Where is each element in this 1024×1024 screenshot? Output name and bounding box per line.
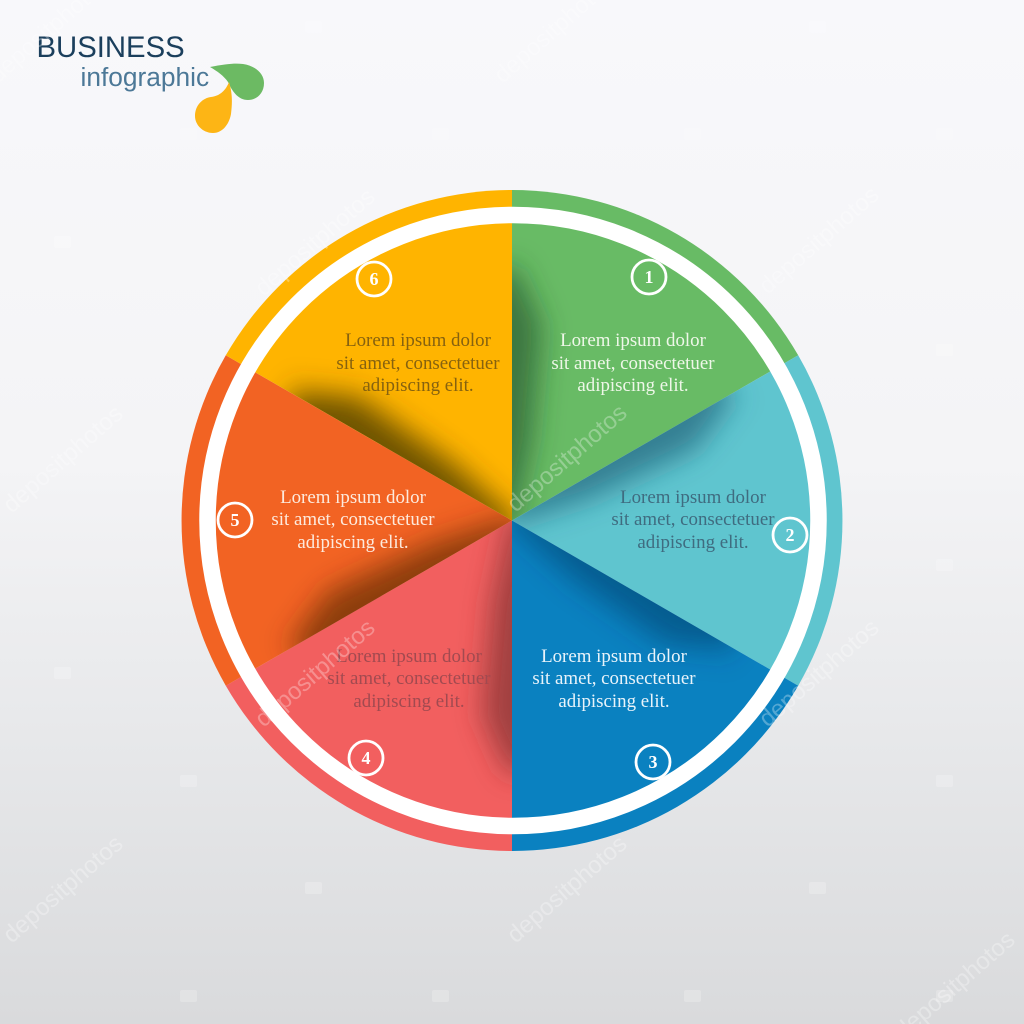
stock photo watermarks: depositphotos	[754, 614, 884, 733]
logo subheading: infographic	[80, 62, 209, 92]
panel 2 number badge: 2	[786, 525, 794, 545]
panel 3 number badge: 3	[648, 752, 658, 772]
panel 1 text: sit amet, consectetuer	[551, 353, 715, 374]
panel 6 text: sit amet, consectetuer	[336, 353, 500, 374]
panel 6 number badge	[357, 262, 391, 296]
panel 6 text: adipiscing elit.	[362, 375, 474, 396]
panel 5 text: adipiscing elit.	[297, 532, 409, 553]
panel 5 number badge: 5	[230, 510, 240, 530]
panel 2 number badge	[773, 518, 807, 552]
segment 4: red	[226, 520, 512, 851]
stock photo watermarks: depositphotos	[502, 830, 632, 949]
icon: green petal	[210, 64, 264, 100]
panel 1 number badge	[632, 260, 666, 294]
segment 1: green	[512, 190, 798, 520]
segment 3: blue	[512, 520, 798, 851]
panel 5 text: Lorem ipsum dolor	[280, 487, 427, 508]
segment 6: yellow	[226, 190, 512, 520]
stock photo watermarks: depositphotos	[250, 614, 380, 733]
white ring	[208, 215, 818, 826]
panel 3 number badge	[636, 745, 670, 779]
stock photo watermarks: depositphotos	[0, 830, 128, 949]
panel 1 text: Lorem ipsum dolor	[560, 330, 707, 351]
icon: orange petal	[195, 82, 232, 133]
stock photo watermarks: depositphotos	[502, 399, 632, 518]
panel 3 text: Lorem ipsum dolor	[541, 646, 688, 667]
segment 5: orange	[182, 355, 546, 686]
stock photo watermarks: depositphotos	[0, 400, 128, 519]
panel 2 text: Lorem ipsum dolor	[620, 487, 767, 508]
panel 1 number badge: 1	[644, 267, 654, 287]
panel 4 text: Lorem ipsum dolor	[336, 646, 483, 667]
stock photo watermarks: depositphotos	[754, 181, 884, 300]
panel 2 text: adipiscing elit.	[637, 532, 749, 553]
panel 1 text: adipiscing elit.	[577, 375, 689, 396]
segment 2: teal	[478, 355, 842, 686]
panel 5 number badge	[218, 503, 252, 537]
stock photo watermarks: depositphotos	[250, 183, 380, 302]
panel 6 text: Lorem ipsum dolor	[345, 330, 492, 351]
panel 4 number badge	[349, 741, 383, 775]
pie chart	[182, 190, 842, 851]
panel 4 text: sit amet, consectetuer	[327, 668, 491, 689]
logo	[36, 31, 264, 133]
panel 4 number badge: 4	[362, 748, 370, 768]
panel 6 number badge: 6	[370, 269, 378, 289]
panel 2 text: sit amet, consectetuer	[611, 509, 775, 530]
panel 3 text: adipiscing elit.	[558, 691, 670, 712]
panel 5 text: sit amet, consectetuer	[271, 509, 435, 530]
logo heading: BUSINESS	[36, 31, 185, 64]
panel 4 text: adipiscing elit.	[353, 691, 465, 712]
panel 3 text: sit amet, consectetuer	[532, 668, 696, 689]
